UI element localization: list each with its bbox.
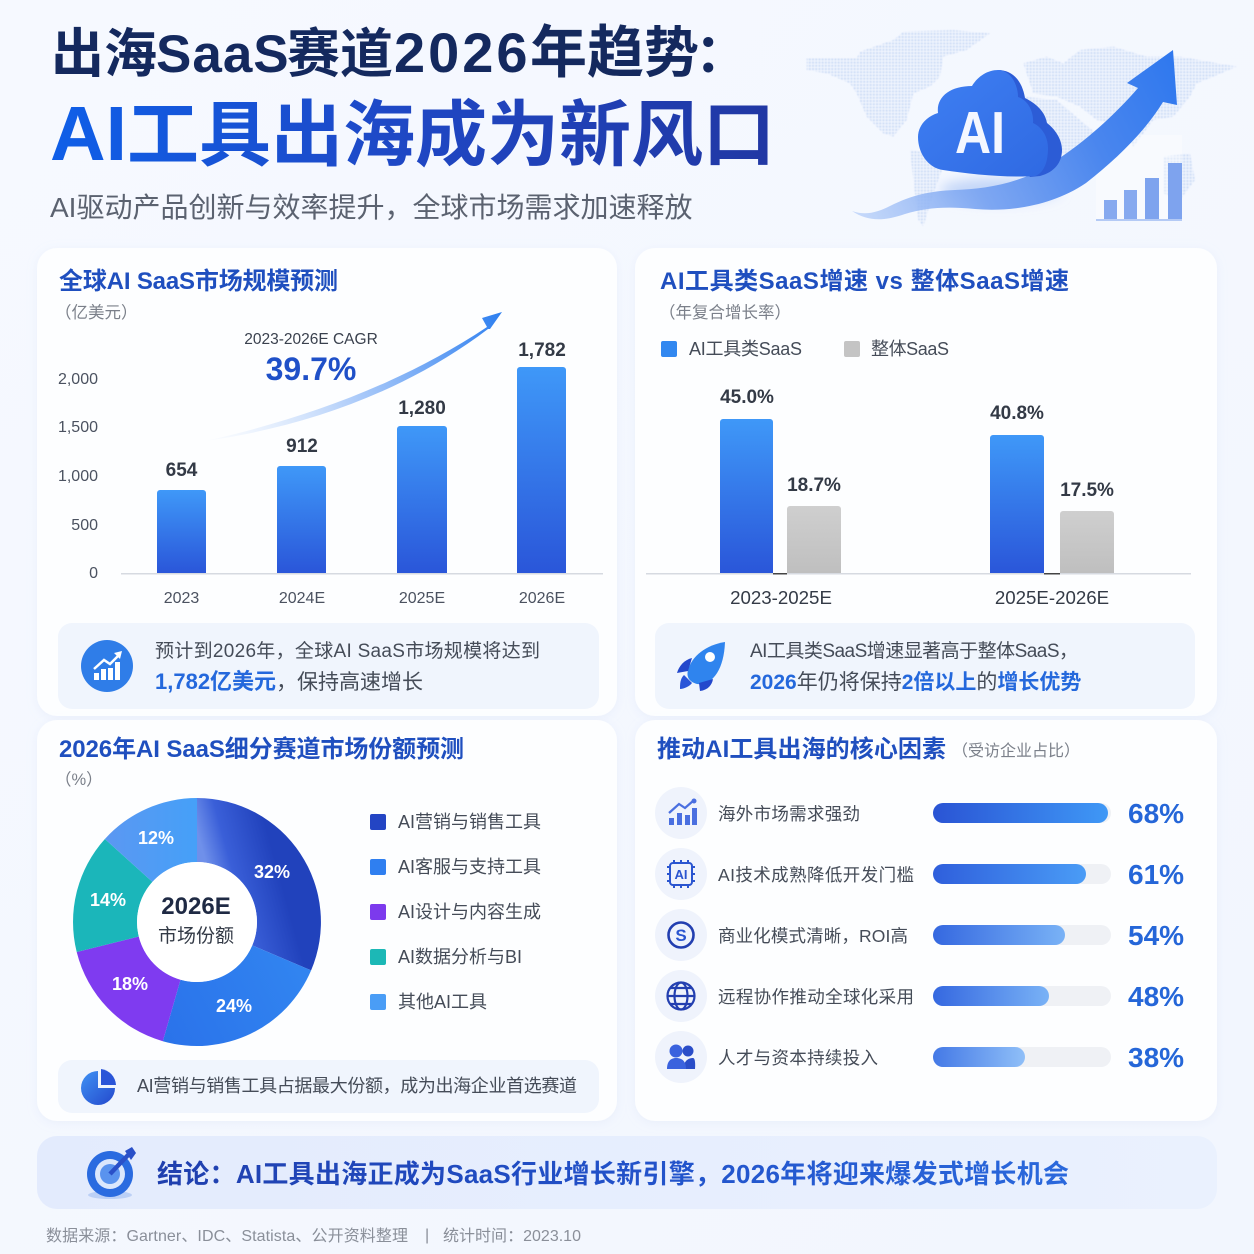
group 2025E-2026E [990, 403, 1114, 608]
row: talent and capital 38%: 38% [1128, 1042, 1184, 1073]
takeaway text: 2026年仍将保持2倍以上的增长优势 [750, 670, 1081, 694]
row: remote collaboration 48%: 远程协作推动全球化采用 [718, 987, 914, 1007]
bar 2024E: 912 [286, 436, 318, 457]
unit note: （%） [55, 770, 103, 789]
segment 32% [197, 798, 321, 970]
panel heading: AI工具类SaaS增速 vs 整体SaaS增速 [660, 268, 1069, 295]
group 2025E-2026E: 17.5% [1060, 480, 1114, 501]
row: remote collaboration 48% [655, 970, 1184, 1022]
bar 2026E: 1,782 [518, 340, 566, 361]
3D cloud with AI [918, 70, 1062, 177]
row: talent and capital 38%: 人才与资本持续投入 [718, 1048, 878, 1068]
group 2023-2025E: 18.7% [787, 475, 841, 496]
bar 2026E: 2026E [519, 590, 565, 607]
source footnote [46, 1227, 581, 1245]
title line 2: 工具出海成为新风口 [127, 96, 775, 176]
legend [661, 339, 949, 359]
slice labels: 12% [138, 828, 174, 848]
donut centre label: 2026E [161, 893, 231, 920]
bar chart: market size: 1,000 [58, 468, 98, 485]
slice labels: 18% [112, 974, 148, 994]
source footnote: | [425, 1227, 429, 1244]
panel: global AI SaaS market size forecast [37, 248, 617, 716]
bar chart: market size: 2,000 [58, 371, 98, 388]
slice labels: 32% [254, 862, 290, 882]
bar chart: market size: 0 [89, 565, 98, 582]
dotted world map [807, 30, 1237, 227]
row: AI tech maturity 61% [655, 848, 1184, 900]
group 2023-2025E [720, 387, 841, 608]
source footnote: 数据来源：Gartner、IDC、Statista、公开资料整理 [46, 1227, 408, 1245]
takeaway box [655, 623, 1195, 709]
title line 1: 出海 [51, 25, 157, 84]
unit note: （年复合增长率） [659, 303, 791, 322]
title line 1: SaaS [156, 25, 290, 84]
donut legend [370, 812, 541, 1012]
panel heading [657, 736, 1080, 763]
bar 2023 [157, 460, 206, 607]
growth curve arrow [205, 312, 502, 441]
group 2025E-2026E: 40.8% [990, 403, 1044, 424]
title line 2: AI [50, 91, 127, 177]
CAGR callout: 2023-2026E CAGR [244, 331, 378, 348]
donut centre label: 市场份额 [158, 925, 234, 947]
segment 12% [105, 798, 197, 882]
bar 2024E: 2024E [279, 590, 325, 607]
group 2025E-2026E: 2025E-2026E [995, 587, 1109, 608]
panel: AI tool SaaS growth vs overall SaaS growth [635, 248, 1217, 716]
icon: pie [81, 1069, 116, 1105]
takeaway text: 预计到2026年，全球AI SaaS市场规模将达到 [155, 640, 540, 662]
takeaway text [750, 640, 1081, 694]
ground glow [940, 178, 1060, 202]
row: clear business model 54%: 商业化模式清晰，ROI高 [718, 926, 908, 946]
icon: demand chart [669, 798, 697, 825]
growth arrow [852, 50, 1177, 219]
title [50, 21, 775, 223]
row: AI tech maturity 61%: 61% [1128, 859, 1184, 890]
row: clear business model 54%: 54% [1128, 920, 1184, 951]
donut legend: AI数据分析与BI [398, 947, 522, 967]
donut legend: 其他AI工具 [398, 992, 487, 1012]
icon: dollar coin [668, 922, 694, 948]
bar 2023: 654 [166, 460, 198, 481]
row: AI tech maturity 61%: AI技术成熟降低开发门槛 [718, 865, 914, 885]
donut legend: AI营销与销售工具 [398, 812, 541, 832]
bar chart: market size [58, 312, 603, 607]
title line 1: 2026 [394, 21, 531, 84]
mini bar chart [1096, 135, 1182, 221]
icon: AI chip: AI [674, 867, 688, 882]
icon: target with arrow [87, 1147, 136, 1199]
bar 2026E [517, 340, 566, 607]
icon: globe [668, 982, 694, 1010]
icon: AI chip [667, 860, 695, 888]
segment 24% [163, 945, 311, 1046]
panel: segment market share forecast [37, 720, 617, 1121]
title line 1: 赛道 [287, 25, 393, 84]
row: talent and capital 38% [655, 1031, 1184, 1083]
group 2023-2025E: 45.0% [720, 387, 774, 408]
hero illustration: AI cloud, world map and growth arrow [807, 30, 1237, 227]
bar chart: market size: 500 [71, 517, 98, 534]
legend: 整体SaaS [871, 339, 949, 359]
takeaway text: AI营销与销售工具占据最大份额，成为出海企业首选赛道 [137, 1076, 577, 1096]
cloud label: AI [955, 100, 1005, 166]
icon: people [667, 1044, 695, 1069]
conclusion banner [37, 1136, 1217, 1209]
title line 1: 势 [644, 22, 699, 84]
CAGR callout: 39.7% [266, 351, 356, 387]
donut legend: AI设计与内容生成 [398, 902, 541, 922]
title line 1: ： [695, 25, 748, 84]
bar 2024E [277, 436, 326, 607]
title line 1: 趋 [587, 21, 644, 85]
bar 2025E [397, 398, 447, 607]
takeaway text: 1,782亿美元，保持高速增长 [155, 669, 423, 694]
slice labels: 24% [216, 996, 252, 1016]
slice labels: 14% [90, 890, 126, 910]
takeaway text: AI工具类SaaS增速显著高于整体SaaS， [750, 640, 1078, 662]
subtitle: AI驱动产品创新与效率提升，全球市场需求加速释放 [50, 192, 692, 223]
takeaway box [58, 623, 599, 709]
panel heading: 2026年AI SaaS细分赛道市场份额预测 [59, 735, 464, 763]
icon: dollar coin: S [675, 926, 687, 945]
conclusion text: 结论：AI工具出海正成为SaaS行业增长新引擎，2026年将迎来爆发式增长机会 [157, 1159, 1069, 1189]
icon: rocket [677, 642, 725, 691]
bar chart: market size: 1,500 [58, 419, 98, 436]
takeaway box [58, 1060, 599, 1113]
takeaway text [155, 640, 540, 694]
row: clear business model 54% [655, 909, 1184, 961]
row: overseas demand 68%: 68% [1128, 798, 1184, 829]
slice labels [90, 828, 290, 1016]
source footnote: 统计时间：2023.10 [443, 1227, 581, 1245]
panel heading: （受访企业占比） [952, 742, 1080, 760]
CAGR callout [244, 331, 378, 387]
grouped bar chart: growth rates [646, 387, 1191, 608]
bar 2025E: 2025E [399, 590, 445, 607]
donut legend: AI客服与支持工具 [398, 857, 541, 877]
title line 1: 年 [530, 21, 587, 85]
row: overseas demand 68%: 海外市场需求强劲 [718, 804, 860, 824]
panel heading: 全球AI SaaS市场规模预测 [59, 268, 338, 295]
panel heading: 推动AI工具出海的核心因素 [657, 736, 946, 763]
icon: rising chart [81, 640, 133, 692]
group 2023-2025E: 2023-2025E [730, 587, 832, 608]
bar 2023: 2023 [164, 590, 199, 607]
segment 18% [77, 936, 180, 1041]
segment 14% [73, 839, 152, 952]
row: remote collaboration 48%: 48% [1128, 981, 1184, 1012]
unit note: （亿美元） [55, 303, 138, 322]
row: overseas demand 68% [655, 787, 1184, 839]
legend: AI工具类SaaS [689, 339, 802, 359]
panel: core drivers of AI tools going global [635, 720, 1217, 1121]
donut chart [73, 798, 321, 1046]
donut centre label [158, 893, 234, 947]
bar 2025E: 1,280 [398, 398, 446, 419]
